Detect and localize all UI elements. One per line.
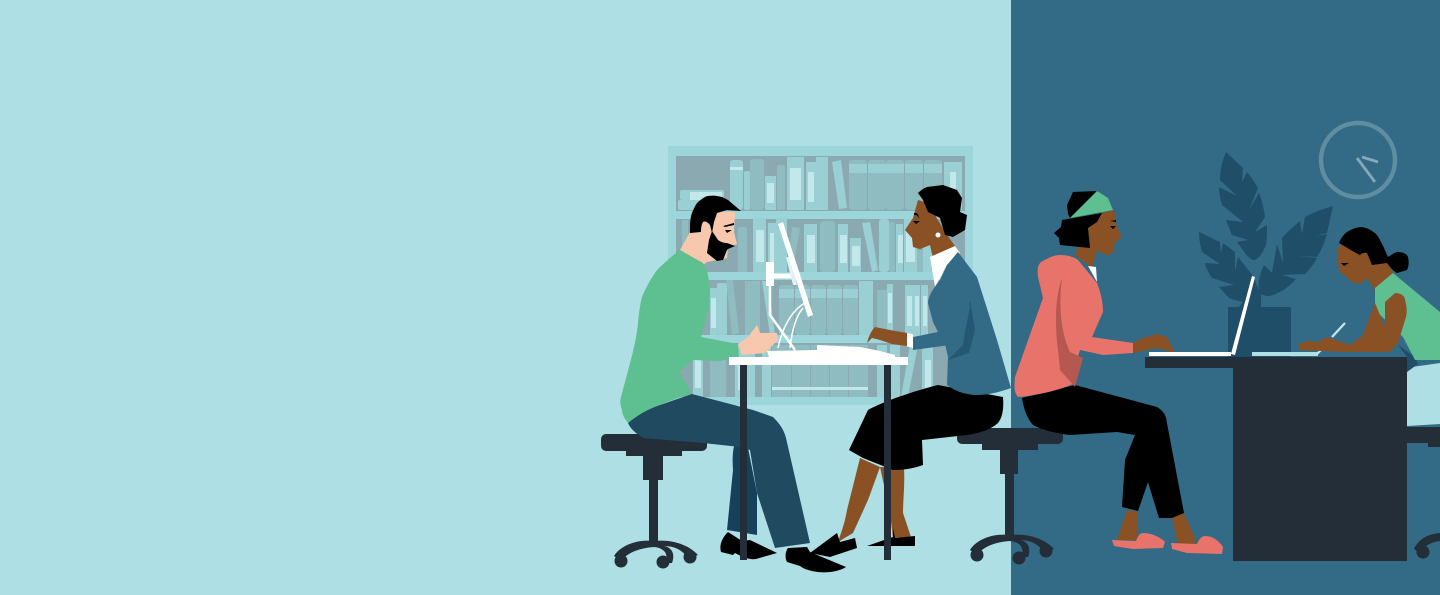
woman back shoe	[867, 528, 915, 546]
book details: third shelf	[711, 289, 927, 328]
hoodie woman shirt collar	[1088, 266, 1097, 282]
woman eyebrow	[914, 213, 919, 218]
hoodie woman eye	[1110, 226, 1116, 229]
panel: light office background	[0, 0, 1011, 595]
panel: dark home background	[1011, 0, 1440, 595]
books: bottom shelf	[693, 345, 933, 397]
woman hair	[918, 185, 967, 237]
woman collar	[930, 246, 960, 287]
book details: second shelf	[756, 230, 915, 266]
man eye	[725, 230, 732, 233]
clock	[1321, 123, 1395, 197]
writing woman neck and face	[1337, 240, 1393, 290]
hoodie woman face and neck	[1075, 210, 1122, 268]
plant pot	[1228, 307, 1291, 357]
person: woman in green top writing	[1252, 227, 1440, 426]
woman sleeve	[913, 265, 970, 350]
bookcase	[668, 146, 973, 405]
person: woman in blue cardigan	[810, 185, 1011, 557]
hoodie	[1014, 255, 1133, 397]
books: third shelf	[710, 280, 928, 335]
desk with monitor and keyboard	[729, 222, 908, 560]
person: woman in coral hoodie	[1014, 191, 1255, 554]
woman eye	[913, 221, 920, 224]
laptop base	[1149, 352, 1231, 356]
laptop screen	[1231, 276, 1255, 355]
stool: middle	[957, 428, 1063, 564]
man beard	[707, 231, 735, 261]
writing woman jacket shadow	[1398, 345, 1418, 372]
paper on desk	[1252, 352, 1318, 356]
table legs	[740, 360, 891, 560]
books: top shelf	[678, 157, 962, 210]
book details: bottom shelf	[695, 360, 931, 390]
hoodie woman right lower leg	[1172, 513, 1197, 545]
writing woman eye	[1341, 263, 1349, 266]
hoodie woman lower hair	[1054, 213, 1102, 248]
hoodie woman hand	[1133, 334, 1175, 353]
hoodie woman eyebrow	[1110, 220, 1116, 222]
woman cardigan body	[935, 252, 1011, 395]
man eyebrow	[723, 223, 734, 227]
hoodie woman headband	[1070, 191, 1113, 218]
writing woman trousers	[1407, 363, 1440, 426]
monitor hinge	[786, 257, 797, 285]
stool: right	[1407, 427, 1440, 558]
monitor arm clamp	[766, 262, 774, 286]
woman earring	[936, 232, 940, 238]
hoodie woman upper hair	[1067, 191, 1097, 218]
man front shoe	[786, 547, 846, 572]
writing woman arm	[1298, 293, 1407, 352]
man hair	[690, 196, 741, 233]
hoodie woman left slipper	[1112, 533, 1165, 549]
monitor screen	[778, 222, 813, 317]
man torso and arm	[620, 250, 739, 423]
man back shoe	[720, 532, 777, 559]
man neck and face	[680, 212, 737, 265]
table top	[729, 357, 908, 365]
hoodie woman left lower leg	[1117, 510, 1138, 540]
woman front shoe	[810, 533, 857, 557]
writing woman green top	[1375, 273, 1440, 360]
woman neck and face	[905, 200, 955, 258]
pencil	[1317, 323, 1345, 354]
plant right leaf	[1259, 206, 1333, 296]
person: man in green sweater	[620, 196, 846, 572]
woman cuff	[906, 333, 913, 348]
woman hand	[867, 327, 907, 346]
stool: left	[601, 434, 707, 568]
plant	[1199, 152, 1333, 357]
woman front leg	[838, 458, 880, 542]
woman cardigan fold	[948, 300, 975, 360]
monitor stand	[770, 276, 805, 350]
hoodie woman trousers	[1022, 385, 1184, 518]
hoodie woman right slipper	[1171, 536, 1223, 554]
keyboard and base	[767, 345, 895, 357]
dark desk	[1145, 357, 1407, 561]
man hand	[738, 325, 778, 355]
books: second shelf	[682, 218, 933, 272]
man front leg and hips	[628, 394, 810, 548]
woman skirt	[849, 385, 1003, 470]
writing woman hair	[1339, 227, 1409, 273]
plant left leaf	[1199, 232, 1261, 308]
plant centre leaf	[1219, 152, 1267, 260]
book details: top shelf	[690, 164, 956, 203]
man back leg	[727, 440, 757, 535]
woman back leg	[880, 467, 911, 538]
hoodie fold	[1056, 278, 1083, 387]
